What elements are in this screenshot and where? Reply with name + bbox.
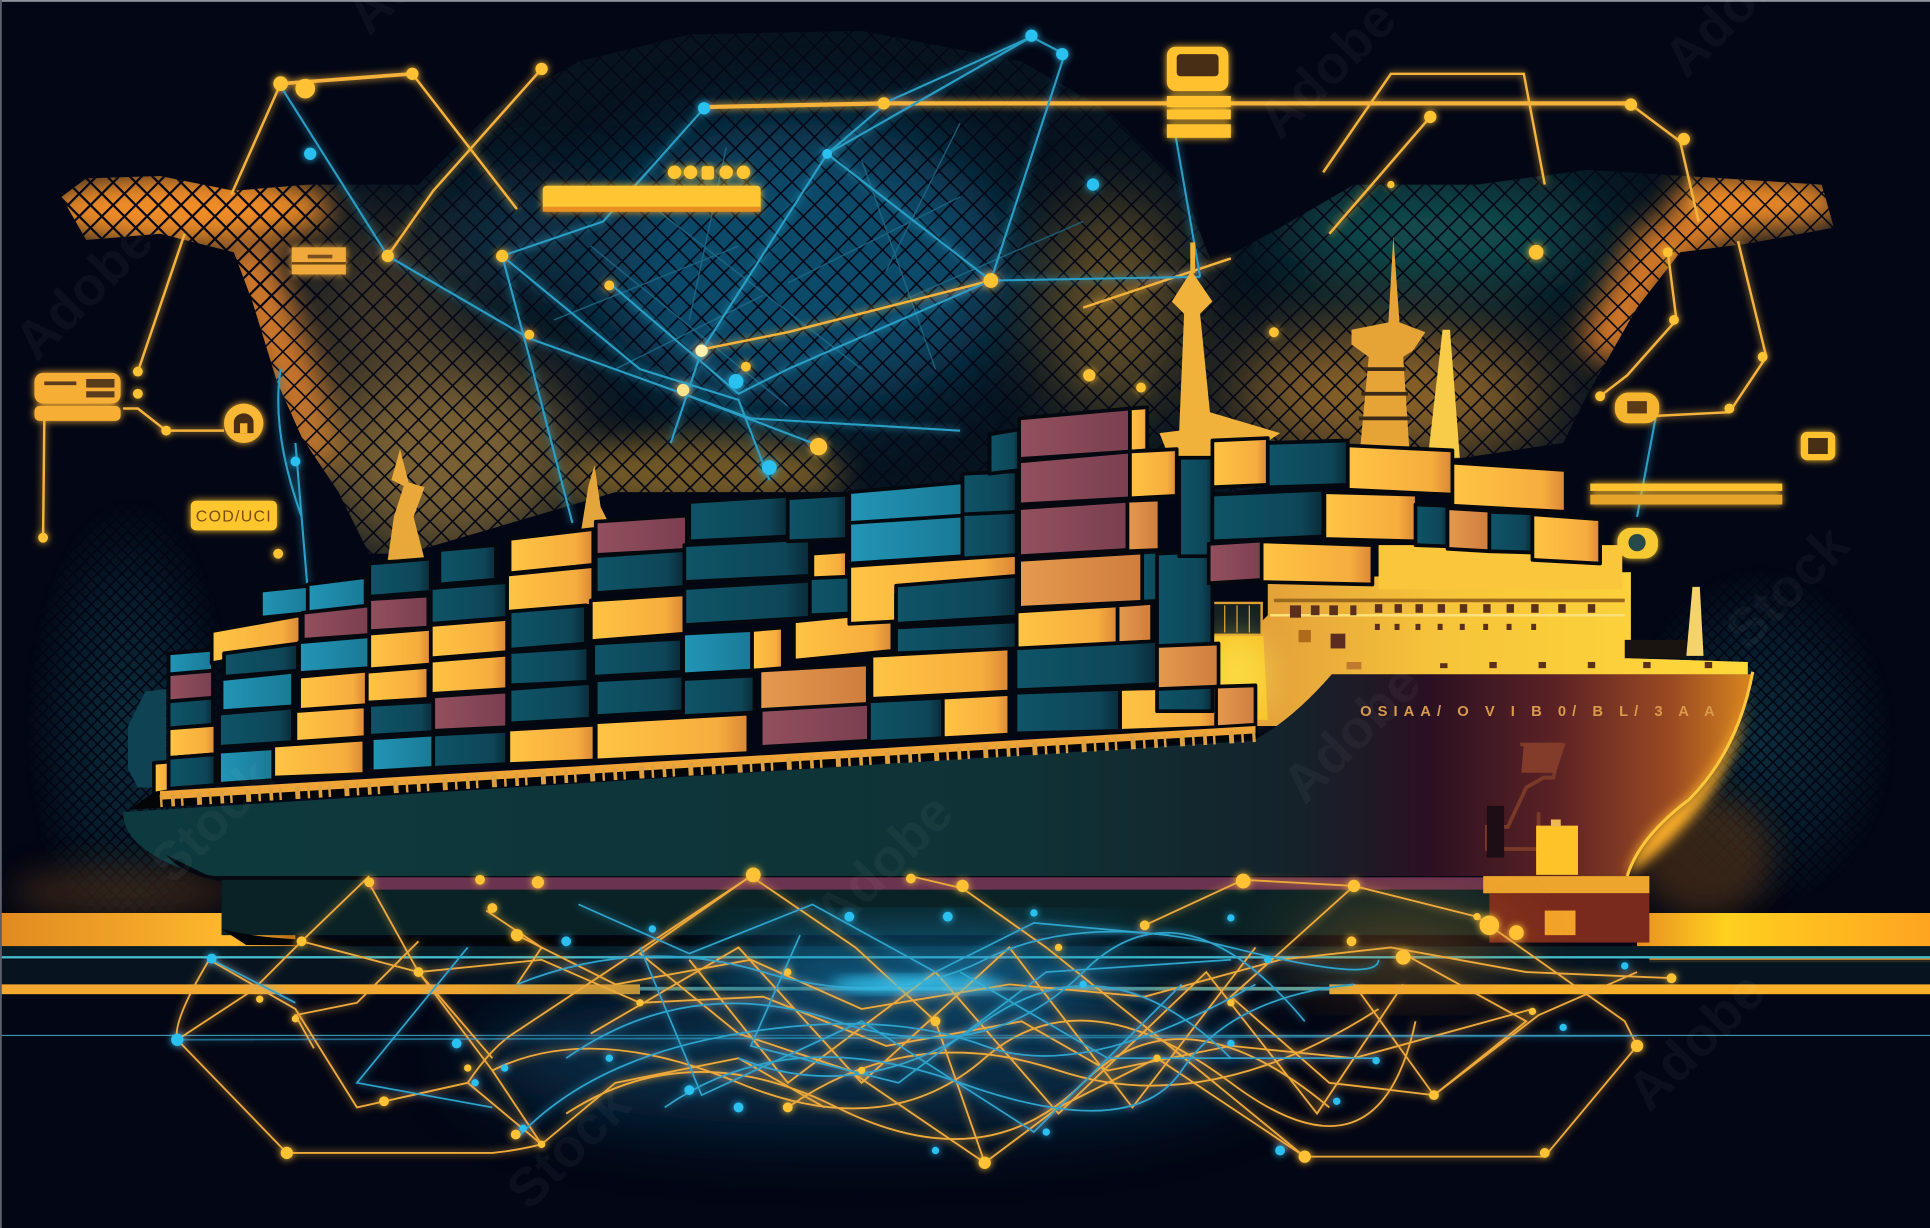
- route nodes: [38, 30, 1768, 559]
- panel: right bar: [1590, 484, 1782, 504]
- panel: left card: [34, 373, 121, 421]
- center light glow: [468, 917, 1514, 1126]
- windows: [1290, 604, 1712, 669]
- lattice halos behind ship: [9, 535, 1874, 913]
- amber mesh lines: [177, 876, 1674, 1163]
- icon: lower right badge: [1617, 528, 1658, 559]
- watermarks: Adobe: [1271, 653, 1432, 814]
- container stacks: [154, 407, 1600, 794]
- stern house: [128, 689, 166, 787]
- deck shadow band: [129, 726, 1258, 810]
- bright center data strip: [831, 977, 1003, 992]
- amber route lines: [43, 69, 1766, 538]
- panel: lower left label: [191, 501, 277, 530]
- ship name: OSIAA/ O V I B 0/ B L/ 3 A A: [1360, 704, 1726, 720]
- deck supports: [160, 736, 1255, 801]
- waterline bands: [0, 913, 1930, 1036]
- keel below hull: [166, 855, 1649, 945]
- hull: [123, 672, 1753, 876]
- rear mast: [1428, 330, 1460, 458]
- mesh nodes: [171, 867, 1676, 1169]
- blue mesh lines: [177, 904, 1637, 1138]
- network: world routes: [38, 30, 1768, 591]
- bow mast: [1686, 587, 1704, 656]
- icon: right badge: [1801, 432, 1835, 460]
- superstructure: [1200, 545, 1748, 726]
- wheelhouse: [1200, 603, 1268, 720]
- watermarks: Adobe: [3, 210, 164, 371]
- deck amber rail: [160, 726, 1255, 800]
- watermarks: Adobe: [803, 782, 965, 944]
- network mesh under ship: [171, 867, 1676, 1169]
- data panels and icons: [34, 47, 1835, 559]
- panel: map label: [292, 247, 346, 274]
- bow glow: [1627, 674, 1753, 876]
- panel: lower left label: COD/UCI: [196, 509, 272, 526]
- watermarks: Stock: [138, 747, 286, 894]
- watermarks: Adobe: [1615, 961, 1777, 1122]
- second crane: [581, 465, 613, 532]
- midship stacks: [507, 471, 1017, 764]
- anchor housing: [1487, 743, 1578, 875]
- forward tall stack: [990, 407, 1255, 733]
- bridge tower: [1159, 271, 1280, 458]
- map street lines: [554, 123, 1083, 406]
- watermarks: Stock: [1714, 513, 1861, 661]
- icon: upper right badge: [1615, 393, 1659, 423]
- icon: top terminal: [1167, 47, 1231, 138]
- rear tower: [1351, 236, 1425, 449]
- world map: [37, 25, 1846, 566]
- icon: left round lock: [224, 404, 263, 443]
- hull body: [123, 674, 1753, 876]
- ship masts and cranes: [128, 236, 1460, 787]
- panel: top center bar with dots: [543, 165, 761, 212]
- left crane: [388, 449, 425, 560]
- dark gap behind bow: [1625, 640, 1686, 658]
- aft stacks: [1179, 438, 1600, 584]
- watermarks: Stock: [495, 1073, 643, 1220]
- stern left stacks: [169, 545, 507, 789]
- blue route lines: [278, 37, 1656, 591]
- stern amber block: [154, 762, 169, 794]
